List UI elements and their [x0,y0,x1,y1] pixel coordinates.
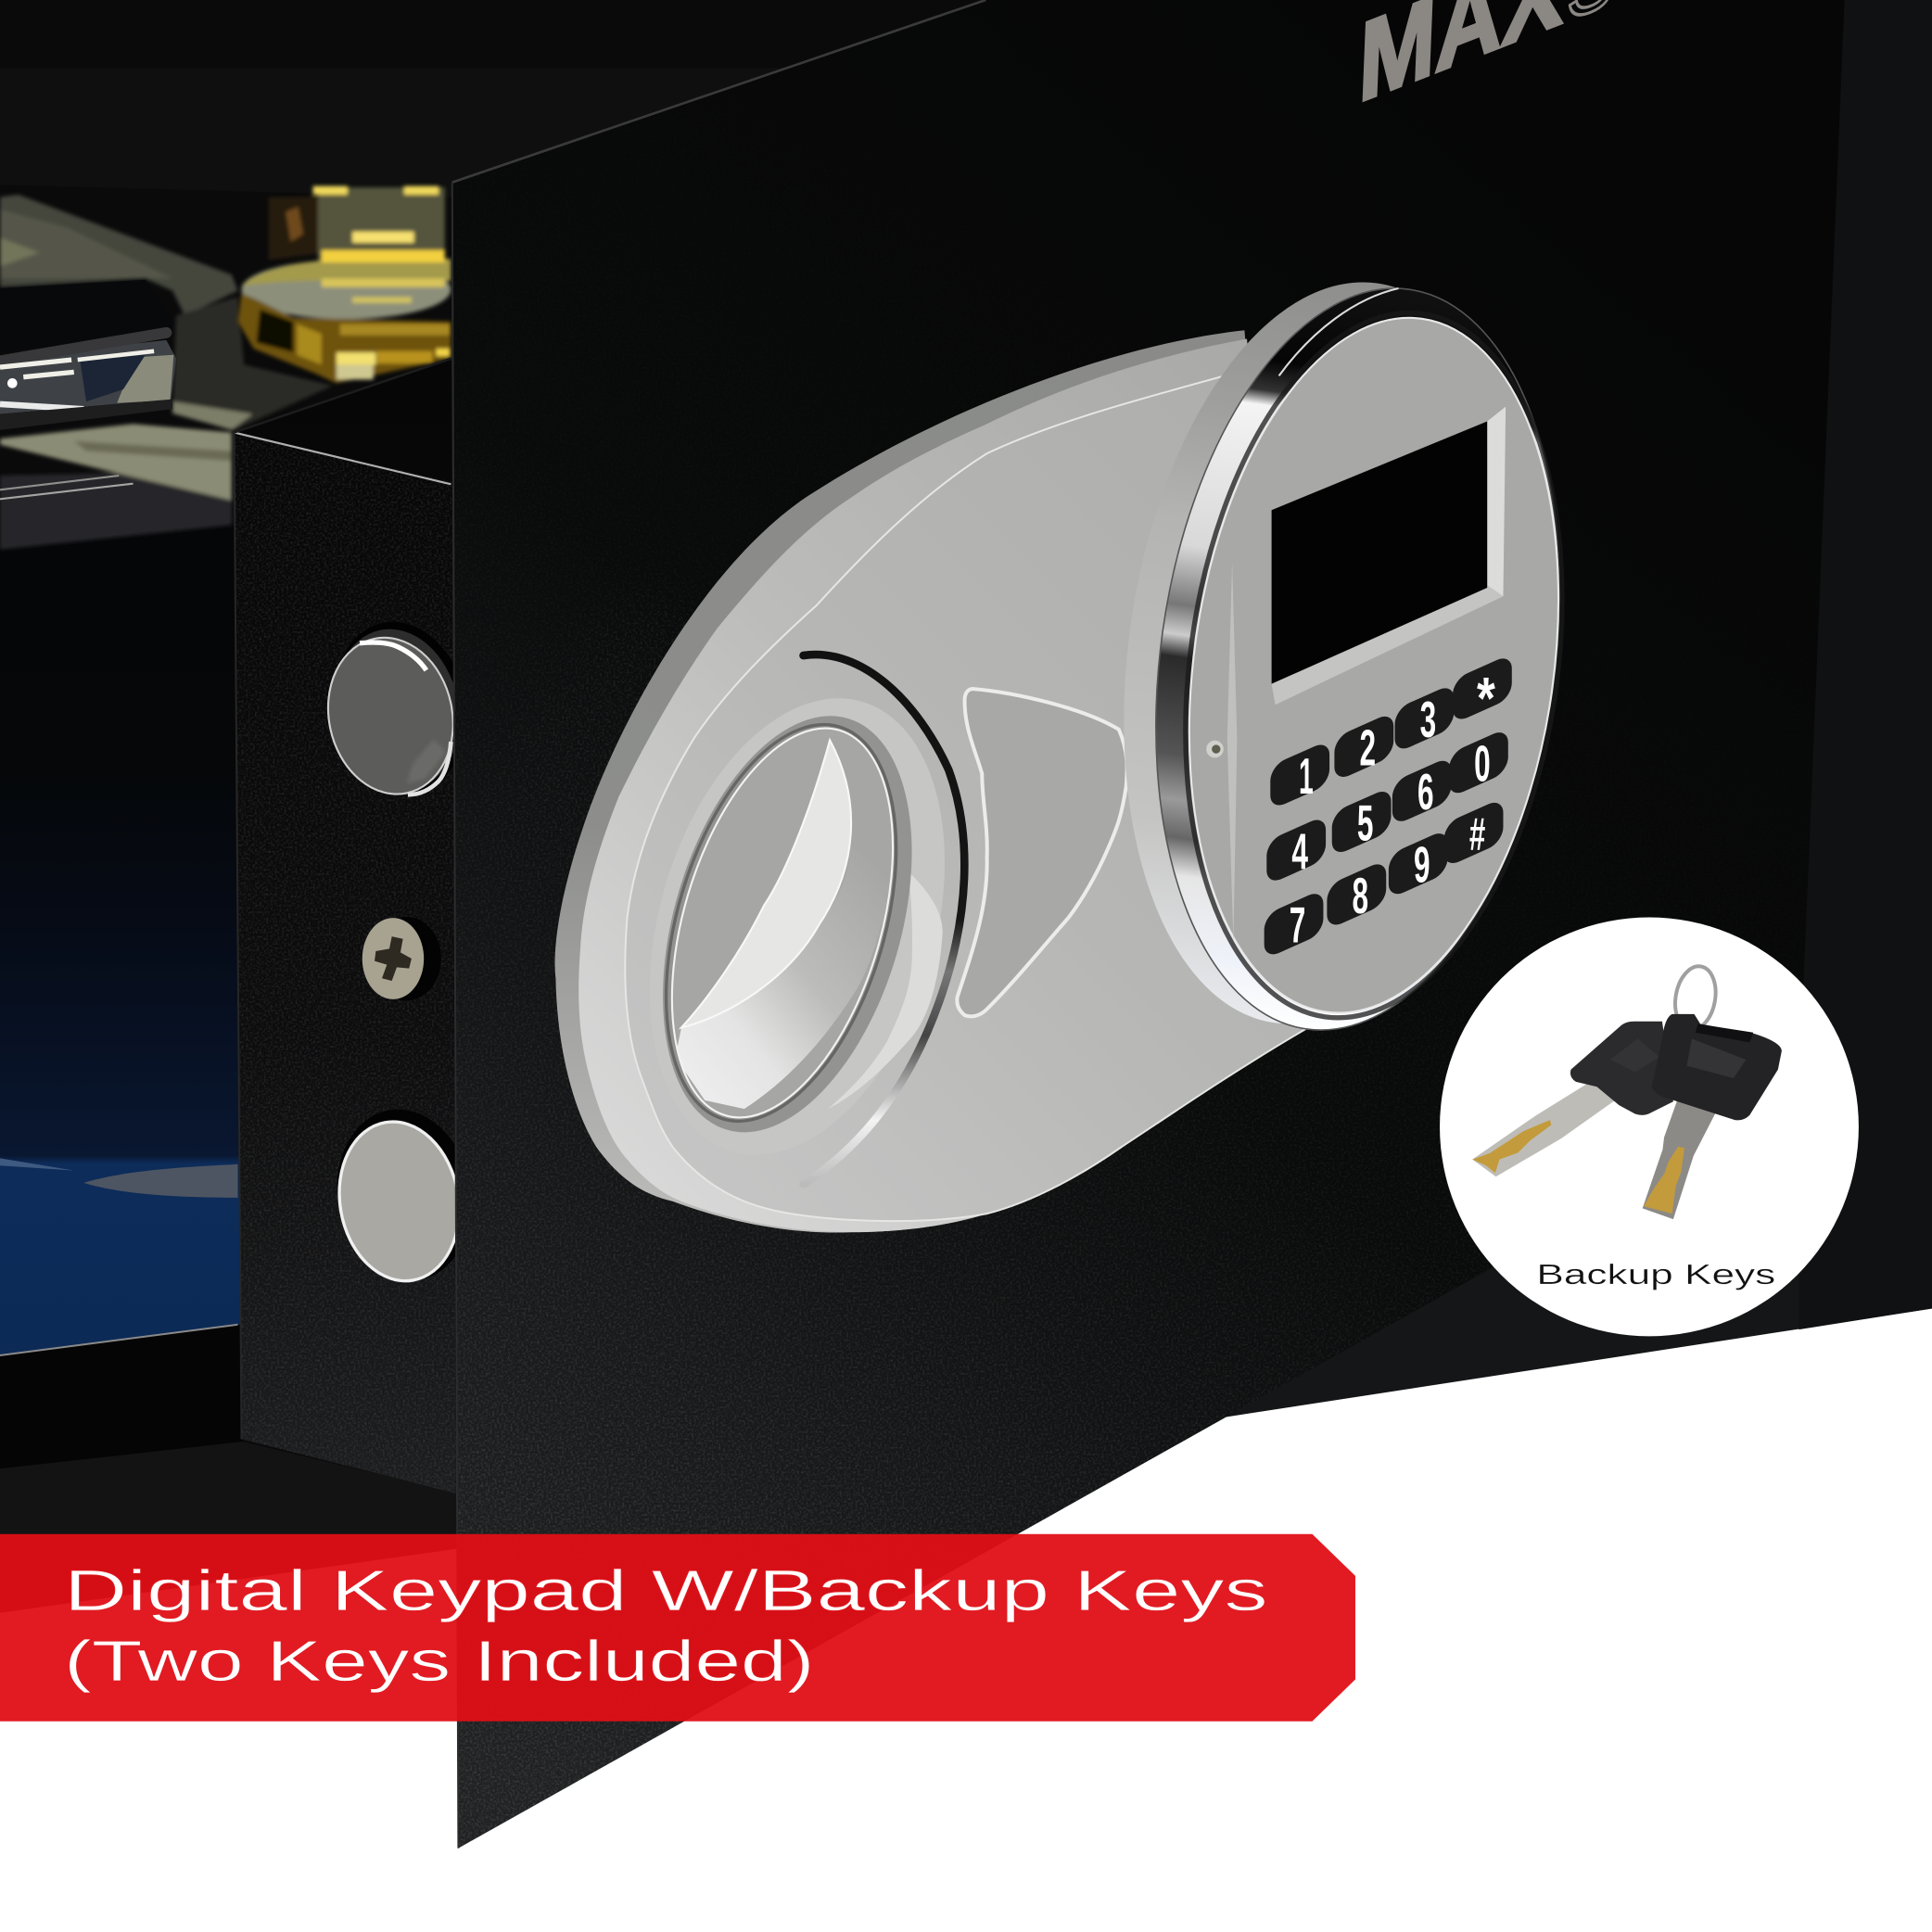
gold watch [238,186,451,383]
door side flange [234,358,456,1493]
dial crescent [681,740,851,1027]
key 3: 3 [1420,693,1436,748]
thumb dial [664,723,897,1124]
key 2: 2 [1359,721,1376,777]
safe interior [0,0,1010,1613]
phone [0,280,176,430]
key 9 [1389,829,1448,899]
raised dial ring [600,664,995,1189]
safe door panel [452,0,1850,1849]
keypad module [1079,256,1605,1056]
key hash [1444,797,1503,869]
key star: * [1477,667,1495,731]
banner heading line 2: (Two Keys Included) [64,1629,815,1694]
key 0 [1449,728,1508,798]
electronic lock plate [555,330,1306,1233]
key 1 [1270,740,1329,810]
key 0: 0 [1474,737,1491,793]
interior floor [0,1325,458,1534]
banner heading line 1: Digital Keypad W/Backup Keys [64,1558,1268,1623]
key 7: 7 [1290,898,1305,954]
chrome ring [1112,262,1605,1056]
key 3 [1395,683,1454,754]
shelf with banknotes and phone [0,195,333,550]
key 2 [1334,711,1393,782]
key 6: 6 [1417,765,1434,820]
locking bolt bottom [324,1099,485,1291]
key star [1453,654,1512,731]
key 8 [1327,859,1386,930]
plate outer layer [555,330,1306,1233]
key 7 [1265,889,1323,960]
key 1: 1 [1299,749,1314,805]
plate top layer [625,370,1306,1221]
plate middle layer [578,338,1306,1232]
interior blue back wall [0,523,240,1355]
right key [1643,1014,1782,1219]
screw [362,917,441,1000]
key 8: 8 [1353,869,1368,924]
key ring [1671,963,1721,1033]
key 6 [1392,756,1452,826]
dial recess [618,686,957,1162]
display screen [1272,407,1506,705]
key 9: 9 [1414,838,1430,894]
reset pin [1206,741,1224,757]
lock cylinder body [1079,256,1572,1050]
red banner [0,1534,1355,1722]
left key [1472,1022,1673,1176]
key hash: # [1469,807,1485,860]
key 5: 5 [1357,796,1373,852]
keypad face [1143,288,1605,1042]
curved chrome groove [804,655,964,1184]
locking bolt top [314,609,482,806]
backup keys callout circle [1440,918,1859,1336]
key 5 [1332,786,1392,858]
arrow shaped button [957,689,1127,1016]
safe body [1207,0,1932,1417]
key 4: 4 [1291,824,1308,880]
logo [1357,0,1719,127]
backup keys label: Backup Keys [1536,1259,1775,1290]
key 4 [1266,815,1326,885]
